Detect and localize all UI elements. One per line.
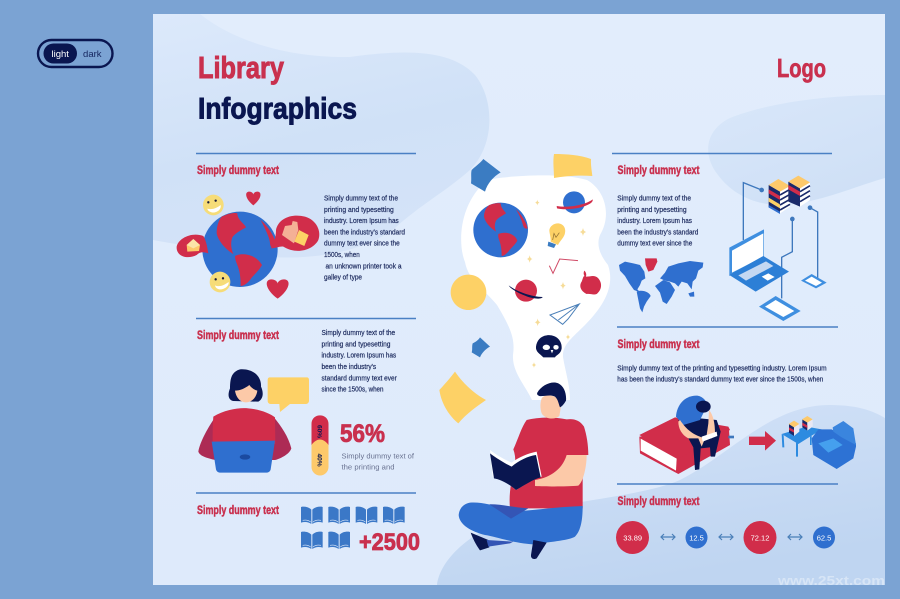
text block: standard dummy text ever [322,373,397,382]
emoji [210,272,230,292]
light/dark toggle [38,40,112,67]
title: Library [198,50,285,85]
world map [619,258,703,312]
statistic caption [342,452,415,472]
jeans [459,503,583,544]
yellow circle [451,275,486,310]
divider lines [196,154,838,493]
book stacks [769,176,810,214]
laptop [729,229,789,292]
text block [322,328,397,394]
circle 72.12: 72.12 [751,534,769,542]
circle 12.5: 12.5 [689,534,704,542]
light/dark toggle: dark [83,49,102,60]
speech bubble [268,377,309,412]
statistic caption: Simply dummy text of [342,452,415,460]
text block: printing and typesetting [324,205,394,214]
text block: industry. Lorem Ipsum has [324,216,399,225]
title [198,50,357,126]
speech bubble: mail [177,235,208,257]
arrow [661,534,675,540]
60/40 pill: 60% [316,425,322,438]
text block: has been the industry's standard dummy text ever since the 1500s, when [617,374,823,384]
60/40 pill [312,415,328,476]
skull [536,335,562,357]
table with books [782,416,822,457]
book icons [301,507,405,549]
watermark: www.25xt.com [777,574,885,588]
circle 62.5: 62.5 [817,534,831,542]
paper plane outline [550,304,579,324]
light bulb [548,223,565,248]
text block [617,194,698,248]
forearm [535,455,587,486]
circle 62.5 [813,526,835,548]
sparkles [527,200,586,368]
heading: Simply dummy text [618,165,700,177]
heading: Simply dummy text [618,496,700,508]
paper: yellow [439,372,486,423]
text block: Simply dummy text of the [617,194,691,202]
text block: Simply dummy text of the [322,328,395,337]
connection nodes [759,188,812,221]
title: Infographics [198,92,357,126]
text block: been the industry's standard [324,227,405,236]
shoe [471,533,489,550]
red zigzag [549,259,578,273]
apple [580,271,601,294]
globe illustration [177,192,319,299]
text block: printing and typesetting [617,205,687,214]
panel: comparison numbers [616,496,835,554]
logo: Logo [777,53,826,83]
central illustration: seated reader [439,372,588,559]
text block: printing and typesetting [322,339,390,348]
hair [537,383,566,407]
shirt [510,418,588,508]
globe [473,203,528,257]
circle 33.89: 33.89 [623,534,642,542]
circle 33.89 [616,521,649,554]
text block: dummy text ever since the [324,239,400,248]
circle 72.12 [744,521,776,554]
text block: galley of type [324,273,362,282]
text block: dummy text ever since the [617,239,692,248]
neck and head [540,395,561,419]
56% statistic: 56% [340,420,385,448]
paper: blue [471,159,501,192]
shoe [531,540,547,559]
main panel [153,14,885,585]
heart [246,192,260,205]
panel: social globe [177,165,405,299]
60/40 pill: 40% [316,454,322,467]
text block [324,194,405,282]
circuit lines [743,183,818,298]
planet: blue [557,191,593,213]
heading: Simply dummy text [197,330,279,342]
heart [267,279,289,299]
phone [801,274,827,288]
text block: an unknown printer took a [326,261,402,270]
woman with laptop illustration [198,369,309,473]
text block: been the industry's [322,362,377,371]
paper: yellow [553,154,592,178]
text block [617,364,827,384]
heading: Simply dummy text [197,505,279,517]
text block: Simply dummy text of the printing and typesetting industry. Lorem Ipsum [617,364,827,372]
tablet [759,296,801,321]
heading: Simply dummy text [197,165,279,177]
man on giant book [639,396,734,474]
armchair [812,421,856,469]
statistic caption: the printing and [342,462,394,472]
emoji [203,195,224,215]
panel: reading room [617,339,856,474]
panel: reader with laptop [197,328,415,476]
speech bubble: thumbs up [271,216,319,251]
central illustration: thought cloud [451,154,610,400]
thought cloud [461,175,610,400]
text block: Simply dummy text of the [324,194,398,202]
open book [490,450,542,490]
+2500: +2500 [359,529,420,556]
text block: been the industry's standard [617,227,698,236]
circle 12.5 [686,526,708,548]
text block: 1500s, when [324,250,360,259]
arrow [719,534,733,540]
heading: Simply dummy text [618,339,700,351]
text block: since the 1500s, when [322,385,384,394]
text block: industry. Lorem Ipsum has [322,351,397,360]
planet: red [509,280,543,302]
paper: small blue [472,337,490,357]
arrow [788,534,802,540]
light/dark toggle: light [51,49,69,60]
arrow [749,431,776,451]
panel: digital library [617,165,827,321]
text block: industry. Lorem Ipsum has [617,216,692,225]
panel: books count [197,505,420,556]
